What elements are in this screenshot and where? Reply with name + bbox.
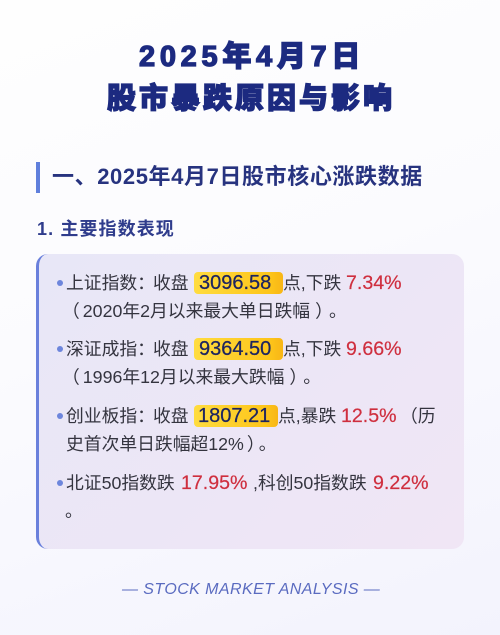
Shenzhen text line 1: 深证成指：收盘 (66, 339, 189, 359)
bullet (57, 346, 63, 352)
Shenzhen text line 2: （1996年12月以来最大跌幅 ） 。 (62, 367, 321, 387)
bullet (57, 280, 63, 286)
plunge text: 点,暴跌 (278, 406, 336, 426)
ChiNext trailing text: （历 (400, 406, 436, 426)
STAR 50 text: ,科创50指数跌 (253, 473, 367, 493)
item: Shanghai index (57, 272, 402, 321)
item: BSE 50 and STAR 50 (57, 472, 429, 521)
fall text: 点,下跌 (283, 273, 341, 293)
plunge 12.5%: 12.5% (341, 405, 397, 427)
highlight: 9364.50 (194, 338, 283, 360)
bullet (57, 413, 63, 419)
trailing full stop: 。 (65, 501, 83, 521)
section accent bar (36, 162, 40, 193)
fall 9.66%: 9.66% (346, 338, 402, 360)
value 3096.58: 3096.58 (199, 272, 271, 294)
ChiNext text line 1: 创业板指：收盘 (66, 406, 189, 426)
fall text: 点,下跌 (283, 339, 341, 359)
bullet (57, 480, 63, 486)
item: Shenzhen index (57, 338, 402, 387)
section heading: 一、2025年4月7日股市核心涨跌数据 (52, 164, 423, 189)
highlight: 3096.58 (194, 272, 283, 294)
Shanghai text line 2: （2020年2月以来最大单日跌幅 ） 。 (62, 301, 347, 321)
fall 17.95%: 17.95% (181, 472, 247, 494)
title line 1: 2025年4月7日 (139, 41, 365, 73)
sub heading: 1. 主要指数表现 (37, 219, 175, 239)
BSE 50 text: 北证50指数跌 (66, 473, 175, 493)
value 1807.21: 1807.21 (198, 405, 270, 427)
ChiNext text line 2: 史首次单日跌幅超12%）。 (66, 434, 277, 454)
title (106, 40, 395, 115)
footer: — STOCK MARKET ANALYSIS — (122, 581, 380, 598)
panel: index performance (36, 254, 464, 549)
value 9364.50: 9364.50 (199, 338, 271, 360)
highlight: 1807.21 (194, 405, 278, 427)
fall 7.34%: 7.34% (346, 272, 402, 294)
title line 2: 股市暴跌原因与影响 (107, 83, 395, 115)
item: ChiNext index (57, 405, 436, 454)
Shanghai text line 1: 上证指数：收盘 (66, 273, 189, 293)
fall 9.22%: 9.22% (373, 472, 429, 494)
